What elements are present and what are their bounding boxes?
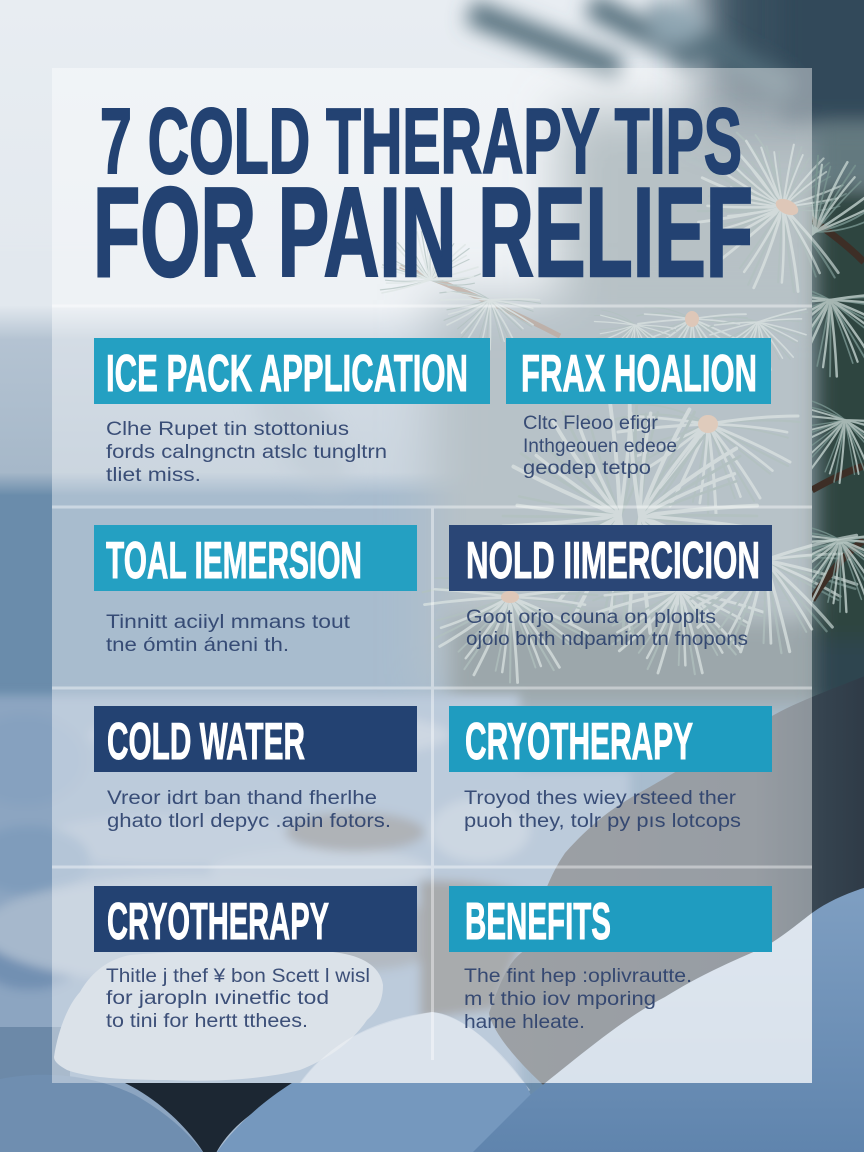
frosted panel <box>52 68 812 1095</box>
tip: cryotherapy navy: for jaropln ıvinetfic tod <box>106 988 329 1009</box>
tip: benefits: BENEFITS <box>465 893 611 951</box>
tip: ice pack application: ICE PACK APPLICATION <box>106 345 468 403</box>
tip: cryotherapy teal <box>449 706 772 832</box>
tip: ice pack application: tliet miss. <box>106 465 201 486</box>
tip: toal iemersion: TOAL IEMERSION <box>106 532 362 590</box>
tip: cold water: Vreor idrt ban thand fherlhe <box>107 788 377 809</box>
tip: nold iimercicion: Goot orjo couna on ploplts <box>466 607 716 628</box>
tip: cold water: COLD WATER <box>107 713 305 771</box>
tip: cryotherapy teal: puoh they, tolr py pıs lotcops <box>464 811 741 832</box>
tip: nold iimercicion: ojoio bnth ndpamim tn fnopons <box>466 629 748 650</box>
tip: cryotherapy navy: to tini for hertt tthees. <box>106 1011 308 1032</box>
tip: toal iemersion <box>94 525 417 656</box>
tip: frax hoalion: Inthgeouen edeoe <box>523 436 677 457</box>
tip: toal iemersion: Tinnitt aciiyl mmans tout <box>106 612 351 633</box>
background photo: pine branches inside panel <box>371 121 864 693</box>
title <box>93 89 753 303</box>
tip: cryotherapy navy: CRYOTHERAPY <box>107 893 329 951</box>
tip: frax hoalion <box>506 338 771 479</box>
tip: cryotherapy navy <box>94 886 417 1032</box>
tip: cold water: ghato tlorl depyc .apin fotors. <box>107 811 391 832</box>
tip: ice pack application: Clhe Rupet tin stottonius <box>106 419 349 440</box>
tip: cryotherapy navy: Thitle j thef ¥ bon Scett l wisl <box>106 966 370 987</box>
tip: ice pack application: fords calngnctn atslc tungltrn <box>106 442 387 463</box>
tip: benefits: hame hleate. <box>464 1012 585 1033</box>
tip: benefits <box>449 886 772 1033</box>
background photo: rocks <box>0 674 864 1152</box>
tip: cryotherapy teal: CRYOTHERAPY <box>465 713 693 771</box>
tip: toal iemersion: tne ómtin áneni th. <box>106 635 289 656</box>
tip: frax hoalion: geodep tetpo <box>523 458 651 479</box>
tip: frax hoalion: Cltc Fleoo efigr <box>523 413 659 434</box>
tip: ice pack application <box>94 338 490 486</box>
tip: cold water <box>94 706 417 832</box>
tip: benefits: The fint hep :oplivrautte. <box>464 966 692 987</box>
background photo: pine branches outside panel <box>812 155 864 614</box>
tip: nold iimercicion <box>449 525 772 650</box>
tip: cryotherapy teal: Troyod thes wiey rsteed ther <box>464 788 737 809</box>
background photo: blurred pine top right <box>430 0 864 710</box>
tip: benefits: m t thio iov mporing <box>464 989 656 1010</box>
